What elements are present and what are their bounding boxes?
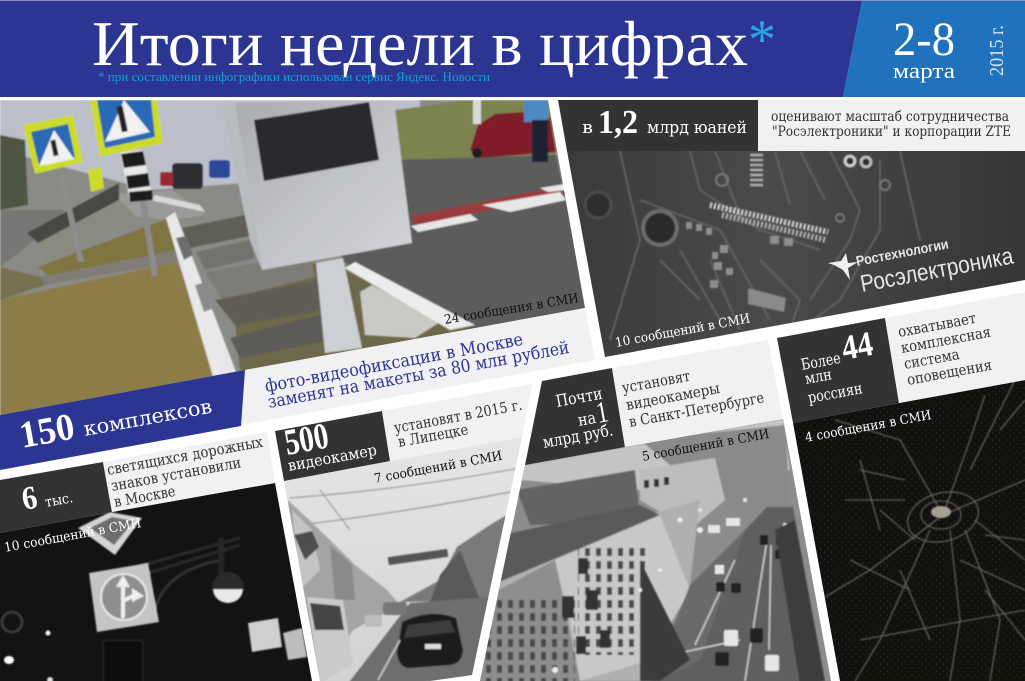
distant sign <box>88 167 104 192</box>
description: в Липецке <box>396 420 470 451</box>
policeman <box>524 100 548 122</box>
description: видеокамеры <box>624 379 721 414</box>
car <box>397 614 463 668</box>
panel: Roselektronika <box>558 100 1025 360</box>
number block <box>558 100 758 151</box>
number block: Более <box>799 349 842 374</box>
caption line 2: заменят на макеты за 80 млн рублей <box>266 338 571 413</box>
number block: 1 <box>593 395 611 430</box>
description: комплексная <box>899 323 992 357</box>
photo: Lipetsk street <box>275 430 530 681</box>
number block: видеокамер <box>286 441 378 475</box>
number block: Почти <box>554 384 604 411</box>
logo star <box>828 253 858 280</box>
photo: night street signs <box>0 480 320 681</box>
description <box>103 432 275 512</box>
number block: на <box>576 408 598 430</box>
number block <box>0 462 112 533</box>
description: установят в 2015 г. <box>392 396 524 437</box>
number block: млрд руб. <box>541 420 615 452</box>
title asterisk: * <box>748 9 776 71</box>
description <box>382 384 532 461</box>
number block <box>275 411 390 481</box>
number block: тыс. <box>44 490 74 511</box>
photo: city lights map <box>790 375 1025 681</box>
description: установят <box>620 367 692 397</box>
number block: россиян <box>806 379 864 407</box>
description: в Санкт-Петербурге <box>627 388 766 431</box>
label: media count: 10 сообщений в СМИ <box>614 311 751 351</box>
number block: 44 <box>838 324 876 368</box>
camera post <box>316 258 362 353</box>
dense chip traces <box>710 205 828 240</box>
description: светящихся дорожных <box>105 433 265 479</box>
label: media count: 24 сообщения в СМИ <box>443 291 580 328</box>
footnote: * при составлении инфографики использован сервис Яндекс. Новости <box>98 69 490 84</box>
panel: speed cameras <box>0 100 600 470</box>
panel: Lipetsk cameras <box>275 384 532 681</box>
label: media count: 4 сообщения в СМИ <box>804 408 933 446</box>
camera window <box>254 102 379 181</box>
pedestrian sign small <box>23 115 83 174</box>
panel: warning system <box>777 292 1025 681</box>
date month: марта <box>893 58 955 83</box>
description: охватывает <box>896 309 977 341</box>
description: оповещения <box>905 356 993 389</box>
road line <box>150 195 205 212</box>
logo text: Ростехнологии <box>855 235 950 269</box>
number block: 500 <box>281 416 332 464</box>
label: media count: 10 сообщений в СМИ <box>3 516 142 556</box>
date year: 2015 г. <box>986 25 1008 76</box>
panel: Saint Petersburg cameras <box>475 340 835 681</box>
photo: circuit board <box>560 150 1025 360</box>
number block: 6 <box>19 480 40 518</box>
number block: млрд юаней <box>647 118 747 138</box>
description <box>612 340 783 447</box>
date numbers: 2-8 <box>893 13 955 66</box>
sign poles <box>66 208 85 263</box>
number block: 1,2 <box>598 104 638 141</box>
description: знаков установили <box>109 453 243 495</box>
number block: в <box>582 118 593 138</box>
title background <box>0 1 862 97</box>
red car <box>470 112 556 158</box>
blue number block <box>0 370 245 470</box>
photo: Nevsky avenue <box>475 415 835 681</box>
road cars <box>172 163 203 189</box>
rail beams <box>182 215 250 248</box>
guard rail <box>166 212 236 380</box>
unit: комплексов <box>82 394 214 441</box>
striped post <box>120 150 153 202</box>
caption line 1: фото-видеофиксации в Москве <box>263 330 525 397</box>
label: media count: 7 сообщений в СМИ <box>373 449 504 487</box>
header band <box>0 0 1025 97</box>
description <box>885 292 1025 403</box>
date background <box>843 1 1025 97</box>
crosswalk <box>410 189 565 226</box>
title: Итоги недели в цифрах <box>92 8 748 79</box>
number: 150 <box>16 406 78 457</box>
description <box>758 100 1025 151</box>
caption background <box>241 308 595 425</box>
photo: roadside camera <box>0 100 600 420</box>
pedestrian sign large <box>90 100 163 157</box>
number block <box>525 368 625 465</box>
number block: млн <box>803 365 833 388</box>
panel: illuminated signs <box>0 432 320 681</box>
description: система <box>902 345 961 373</box>
label: media count: 5 сообщений в СМИ <box>641 427 771 465</box>
camera box <box>235 100 412 270</box>
number block <box>777 318 899 423</box>
bollard <box>473 100 481 124</box>
description: в Москве <box>112 482 177 511</box>
